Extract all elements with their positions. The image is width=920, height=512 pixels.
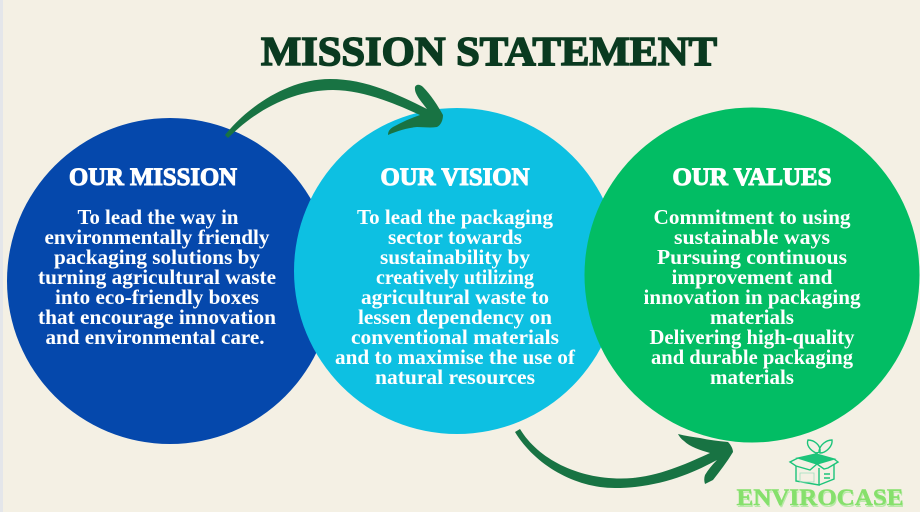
text: values body: improvement and <box>672 265 833 289</box>
title: MISSION STATEMENT <box>261 28 717 74</box>
panel: our vision <box>294 108 620 434</box>
text: values body: materials <box>710 365 794 389</box>
icon: box with sprout <box>790 440 838 485</box>
text: vision body: agricultural waste to <box>361 285 549 309</box>
text: mission body: To lead the way in <box>78 205 239 229</box>
text: mission body: turning agricultural waste <box>38 265 276 289</box>
text: values body: innovation in packaging <box>644 285 861 309</box>
text: values body: sustainable ways <box>674 225 830 249</box>
heading: our mission: OUR MISSION <box>69 164 237 191</box>
text: values body: Delivering high-quality <box>650 325 855 349</box>
text: values body: and durable packaging <box>651 345 853 369</box>
text: values body <box>644 205 861 389</box>
text: mission body <box>38 205 276 349</box>
text: mission body: and environmental care. <box>46 325 264 349</box>
text: mission body: packaging solutions by <box>54 245 260 269</box>
panel: our values <box>584 108 920 442</box>
text: mission body: environmentally friendly <box>44 225 270 249</box>
text: values body: Pursuing continuous <box>657 245 847 269</box>
logo: envirocase <box>736 440 904 512</box>
text: vision body: lessen dependency on <box>358 305 552 329</box>
text: vision body: creatively utilizing <box>376 265 534 289</box>
panel: our mission <box>7 118 333 444</box>
arrow: mission to vision <box>225 79 443 138</box>
text: values body: materials <box>710 305 794 329</box>
text: mission body: that encourage innovation <box>38 305 276 329</box>
logo wordmark: ENVIROCASE <box>738 487 904 512</box>
text: vision body: and to maximise the use of <box>335 345 576 369</box>
text: mission body: into eco-friendly boxes <box>55 285 259 309</box>
heading: our values: OUR VALUES <box>672 164 832 191</box>
text: vision body: natural resources <box>375 365 535 389</box>
text: vision body: To lead the packaging <box>357 205 553 229</box>
arrow: vision to values <box>515 429 733 488</box>
logo wordmark: ENVIROCASE <box>736 485 904 510</box>
text: vision body: conventional materials <box>351 325 559 349</box>
text: values body: Commitment to using <box>654 205 851 229</box>
text: vision body: sector towards <box>388 225 522 249</box>
heading: our vision: OUR VISION <box>380 164 530 191</box>
text: vision body <box>335 205 576 389</box>
text: vision body: sustainability by <box>380 245 531 269</box>
